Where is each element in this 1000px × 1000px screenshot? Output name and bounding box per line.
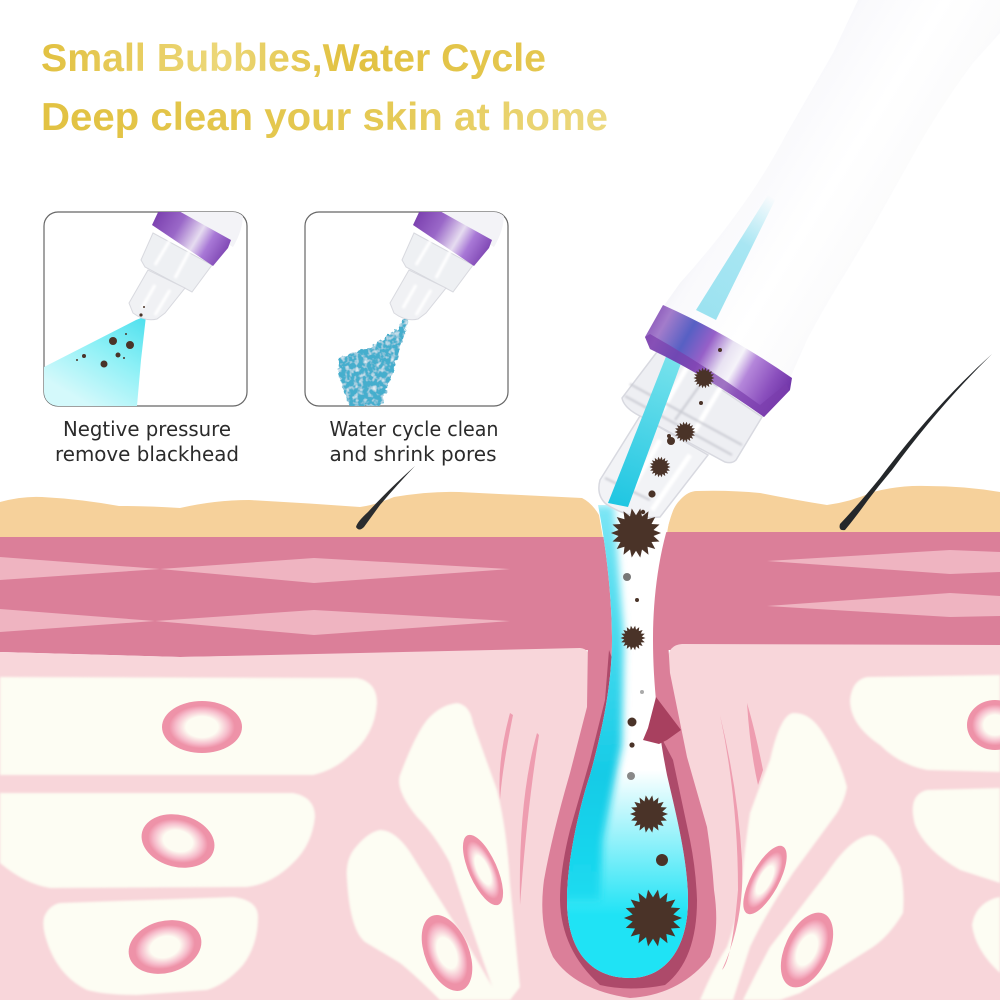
nozzle narrow section <box>599 416 708 517</box>
follicle inner lining <box>560 650 697 988</box>
handle body <box>663 0 1000 378</box>
mini nozzle narrow <box>390 270 446 320</box>
mini nozzle wide <box>402 233 473 292</box>
channel white fill <box>567 505 688 978</box>
water channel <box>560 505 688 978</box>
title: Small Bubbles,Water Cycle <box>41 37 546 80</box>
follicle wall <box>542 640 716 998</box>
panel: negative pressure <box>44 205 247 406</box>
mini handle <box>180 212 243 247</box>
dots <box>623 348 722 866</box>
large particles <box>611 368 714 946</box>
skin surface layer right <box>667 486 1000 534</box>
hair small <box>356 466 415 530</box>
nozzle wide section <box>622 348 762 463</box>
water gradient <box>567 505 688 978</box>
mini collar <box>152 212 231 266</box>
fat cells <box>0 675 1000 1000</box>
skin surface layer left <box>0 492 603 538</box>
panel 2 frame <box>305 212 508 406</box>
nozzle water stripe <box>608 354 683 507</box>
title: Deep clean your skin at home <box>41 96 608 139</box>
panel: skin cross-section <box>0 354 1000 1000</box>
dermis light fibres <box>0 550 1000 635</box>
panel: water cycle <box>305 205 508 407</box>
mini nozzle wide <box>141 233 212 292</box>
water left edge <box>560 505 624 900</box>
panel 1 frame <box>44 212 247 406</box>
label: water cycle clean: Water cycle clean <box>330 417 498 441</box>
nozzle details <box>605 362 742 510</box>
water splash <box>338 313 410 407</box>
panel 1 illustration <box>44 205 243 406</box>
collar lower lip <box>645 334 790 417</box>
device: handle <box>599 0 1000 517</box>
mini nozzle narrow <box>129 270 185 320</box>
mini device <box>390 205 504 320</box>
dermis band <box>0 532 1000 657</box>
sebaceous ellipses <box>123 700 1000 998</box>
mini nozzle glass details <box>403 240 451 315</box>
arrow <box>643 697 681 744</box>
label: shrink pores: and shrink pores <box>330 442 496 466</box>
subcutaneous tissue <box>0 644 1000 1000</box>
collar <box>645 305 792 417</box>
water stripe <box>696 195 775 320</box>
tissue striations <box>499 703 763 970</box>
hair large <box>840 354 992 530</box>
blackhead particles <box>611 348 722 946</box>
panel 2 illustration <box>338 205 504 407</box>
suction spray <box>44 316 146 406</box>
title <box>41 37 608 139</box>
mini handle <box>442 212 504 247</box>
mini nozzle glass details <box>142 240 190 315</box>
mini collar <box>413 212 492 266</box>
label: remove blackhead: remove blackhead <box>55 442 239 466</box>
dust dots <box>76 306 145 368</box>
label: negative pressure: Negtive pressure <box>63 417 231 441</box>
